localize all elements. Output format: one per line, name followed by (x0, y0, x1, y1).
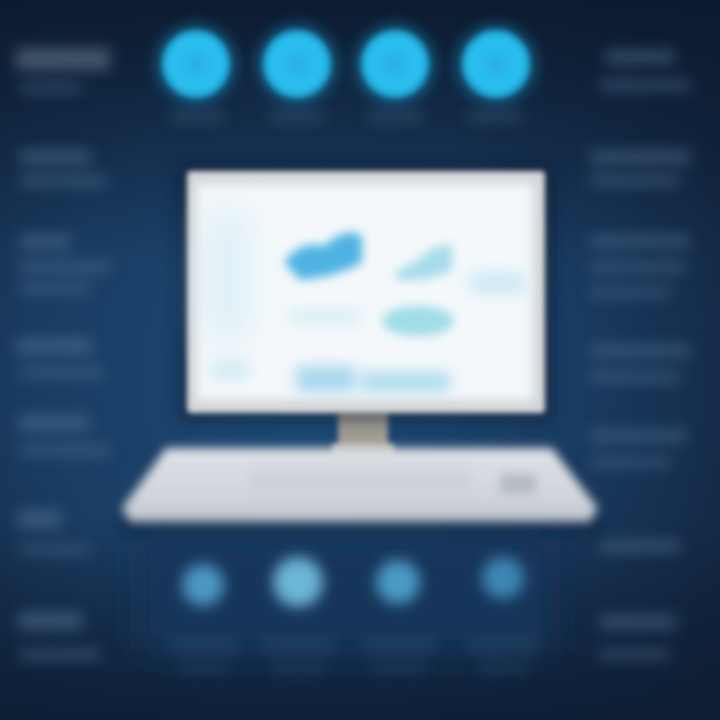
captions: labels under top circles (170, 112, 522, 121)
captions: labels under bottom circles (170, 640, 538, 671)
screen: blurred chart shapes (205, 210, 526, 392)
monitor stand (332, 410, 394, 464)
icons: top row of cyan circles (156, 24, 536, 104)
panel: right column of blurred text (590, 50, 690, 659)
keyboard base (120, 448, 600, 530)
panel: left column of blurred text (16, 48, 110, 659)
icons: bottom row of muted circles (182, 557, 524, 607)
monitor (178, 163, 554, 421)
